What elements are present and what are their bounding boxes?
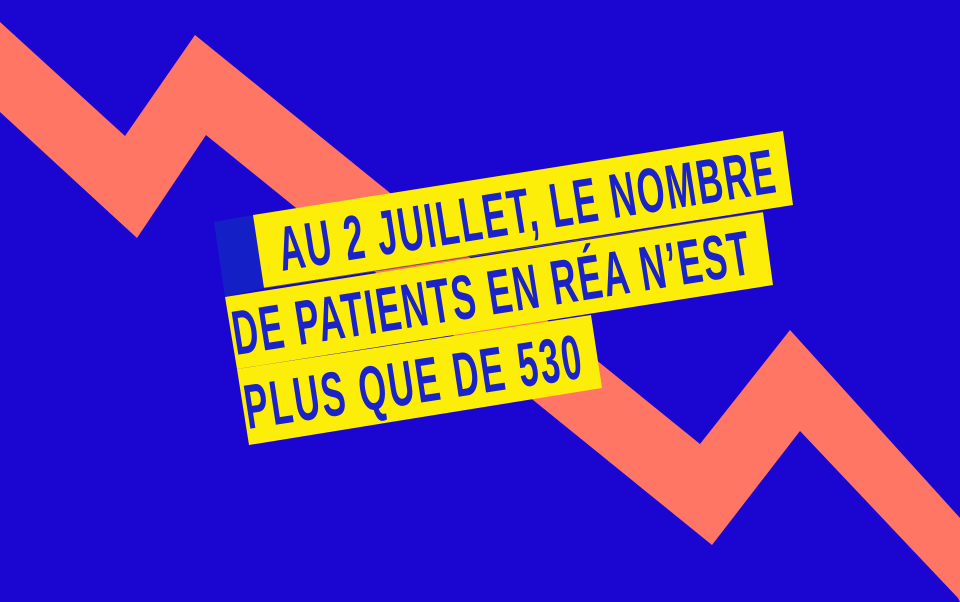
headline block — [214, 131, 793, 445]
yellow band: line 2 — [225, 212, 773, 369]
headline line 1: AU 2 JUILLET, LE NOMBRE — [273, 136, 780, 284]
headline line 3: PLUS QUE DE 530 — [239, 321, 586, 442]
blue indent patch — [214, 215, 264, 297]
yellow band: line 3 — [237, 315, 602, 445]
headline line 2: DE PATIENTS EN RÉA N’EST — [227, 218, 755, 368]
yellow band: line 1 — [253, 131, 793, 288]
